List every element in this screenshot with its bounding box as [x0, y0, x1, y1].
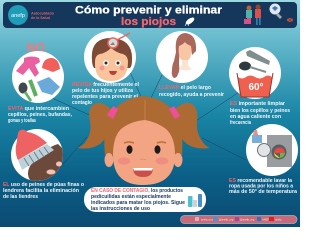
text: gomas y toallas: [8, 118, 36, 124]
washer door: [258, 144, 270, 156]
icon: brush: [246, 50, 270, 65]
eyes: [126, 145, 160, 154]
text: lendrera facilita la eliminación: [3, 188, 79, 194]
icon: round brush: [239, 62, 266, 72]
icon: cap: [42, 58, 60, 72]
text: laundry: ES recomendable lavar la: [229, 178, 292, 184]
boy head: [92, 38, 132, 81]
brows: [124, 142, 166, 143]
icon: basin 60: 60°: [248, 82, 264, 93]
fingers: [46, 162, 62, 174]
text: bien los cepillos y peines: [230, 108, 290, 114]
text: repelentes para prevenir el: [72, 94, 139, 100]
footer: social bar: ANEFP: [262, 218, 271, 222]
girl illustration: [77, 96, 210, 185]
text: recogido, ayuda a prevenir: [159, 92, 224, 98]
washer window: [272, 144, 286, 160]
hair patch: [28, 144, 63, 181]
ears: [104, 153, 182, 167]
cheeks: [118, 157, 168, 165]
face: [113, 120, 175, 185]
nose: [140, 159, 146, 160]
icon: brush: [18, 82, 31, 101]
footer: social bar: @anefp_org: [240, 218, 255, 222]
icon: comb: [30, 80, 36, 96]
icon: bottles: [188, 194, 202, 207]
title: los piojos: [121, 16, 176, 28]
logo: Autocuidado: [31, 12, 54, 16]
NO label: NO: [27, 41, 46, 55]
hair part: [144, 100, 146, 120]
hair ties: [107, 106, 180, 119]
logo: anefp: [11, 13, 25, 19]
washer body: [267, 135, 292, 167]
footer: social bar: anefp.com: [201, 218, 213, 222]
text: más de 50° de temperatura: [229, 189, 297, 195]
text: fine comb: EL uso de peines de púas finas o: [3, 182, 84, 188]
panel: fine comb: [11, 129, 63, 181]
connector lines: [52, 72, 246, 170]
icon: family: [244, 4, 261, 25]
footer: social bar: [180, 216, 297, 224]
text: evita: EVITA que intercambien: [8, 106, 69, 112]
callout: contagion: las instrucciones de uso: [91, 206, 150, 212]
footer: social bar: @anefp_org: [219, 218, 234, 222]
comb teeth: [18, 144, 54, 170]
text: contagio: [72, 100, 92, 106]
woman hair: [172, 33, 196, 78]
text: de las liendres: [3, 194, 38, 200]
callout: contagion: pedicuilidas están especialmente: [91, 194, 171, 200]
icon: louse: [185, 16, 195, 26]
woman neck: [179, 60, 192, 70]
panel: long hair: [156, 31, 208, 83]
text: frecuencia: [230, 120, 251, 126]
text: en agua caliente con: [230, 114, 281, 120]
title: [75, 4, 223, 28]
callout: contagion: EN CASO DE CONTAGIO, los productos: [91, 188, 183, 194]
icon: magnifier: [108, 33, 130, 48]
footer: social bar: anefp: [275, 218, 282, 222]
pigtail left: [77, 103, 112, 148]
hair back: [104, 96, 182, 155]
text: llevar: LLEVAR el pelo largo: [159, 85, 211, 91]
text: pelo de tus hijos y utiliza: [72, 88, 133, 94]
text: ropa usada por los niños a: [229, 184, 293, 190]
laundry basket: [252, 130, 262, 143]
text: revisa: REVISA frecuentemente el: [72, 82, 140, 88]
panel: hot water: [229, 47, 281, 99]
icon: lamp: [270, 4, 282, 19]
title bar: [3, 2, 297, 28]
callout: contagion: [84, 187, 206, 212]
icon: scarf: [16, 56, 40, 77]
callout: contagion: indicados para matar los piojos. Sigue: [91, 200, 185, 206]
logo: [8, 5, 54, 25]
woman face: [179, 42, 191, 61]
mouth: [133, 168, 153, 177]
comb handle: [16, 130, 47, 160]
panel: shared items: [12, 51, 64, 103]
panel: washing machine: [246, 124, 298, 176]
icon: bug: [287, 17, 293, 23]
panel: checking: [84, 31, 136, 83]
text: cepillos, peines, bufandas,: [8, 112, 73, 118]
icon: towel: [37, 77, 60, 95]
logo: de la Salud: [31, 16, 50, 20]
pigtail right: [174, 103, 210, 148]
title: Cómo prevenir y eliminar: [75, 4, 223, 16]
text: limpiar: ES importante limpiar: [230, 101, 285, 107]
